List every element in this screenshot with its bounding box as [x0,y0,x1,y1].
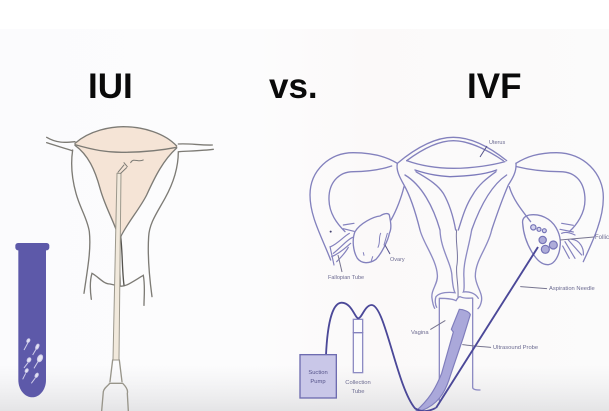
label: Aspiration Needle: Aspiration Needle [549,286,595,292]
label: Vagina: Vagina [411,330,429,336]
fimbriae [560,223,583,258]
label: Uterus: Uterus [489,140,505,146]
cervical canal [118,237,124,286]
heading: IVF: IVF [467,67,521,106]
leader: vagina [431,321,445,329]
uterine wall [72,150,90,293]
ovary outline [523,215,560,265]
catheter [113,173,121,360]
tube dot [330,231,332,233]
ultrasound probe [416,309,470,411]
IVF equipment [300,287,547,411]
suction tubing [326,303,435,411]
label: Suction Pump: Suction [308,370,328,376]
left ovary and fimbriae [330,214,391,265]
vaginal canal walls [439,297,480,401]
leader: Fallopian Tube [338,255,342,272]
label: Ultrasound Probe: Ultrasound Probe [493,345,538,351]
leader: Uterus [480,146,487,157]
right ovarian ligament [509,187,531,222]
cervical canal [456,230,458,297]
fallopian tubes [47,137,213,152]
uterine body [397,163,420,230]
leader: ultrasound probe [463,345,491,347]
ovary marks [363,233,387,261]
leader: aspiration needle [521,287,547,289]
label: Suction Pump: Pump [310,379,326,385]
IVF uterus and tubes [310,137,603,262]
right ovary and fimbriae [523,215,583,265]
IVF lower reproductive tract [416,230,492,411]
tube rim [15,243,49,250]
test tube with sperm [15,243,49,397]
suction pump [300,355,336,398]
uterine cavity shading [75,127,177,237]
uterine cavity [415,170,497,177]
label: Ovary: Ovary [390,257,405,263]
left fallopian tube [310,153,397,260]
left ovarian ligament [391,187,404,220]
outer vaginal fornix [420,230,492,309]
heading: IUI: IUI [88,67,133,106]
catheter tip label [131,160,143,163]
heading: vs.: vs. [269,67,318,106]
label: Fallopian Tube: Fallopian Tube [328,275,364,281]
fimbriae [330,223,354,265]
anatomy labels [308,140,609,395]
inner cervix walls [435,230,478,307]
ovary outline [353,214,391,263]
collection tube [353,319,363,373]
syringe [102,360,128,411]
label: Collection Tube: Tube [352,389,364,395]
follicles [531,225,557,253]
uterus outline [75,127,177,146]
right fallopian tube [516,153,603,262]
catheter tip [118,163,127,173]
aspiration needle [436,247,538,408]
leader: Follicle [560,237,594,240]
cervix and vaginal fornix [90,273,144,305]
uterus fundus [397,137,507,163]
leader: Ovary [385,245,390,254]
label: Collection Tube: Collection [345,380,371,386]
tube body [18,248,46,397]
sperm cells [23,338,44,383]
IUI uterus diagram [47,127,213,411]
